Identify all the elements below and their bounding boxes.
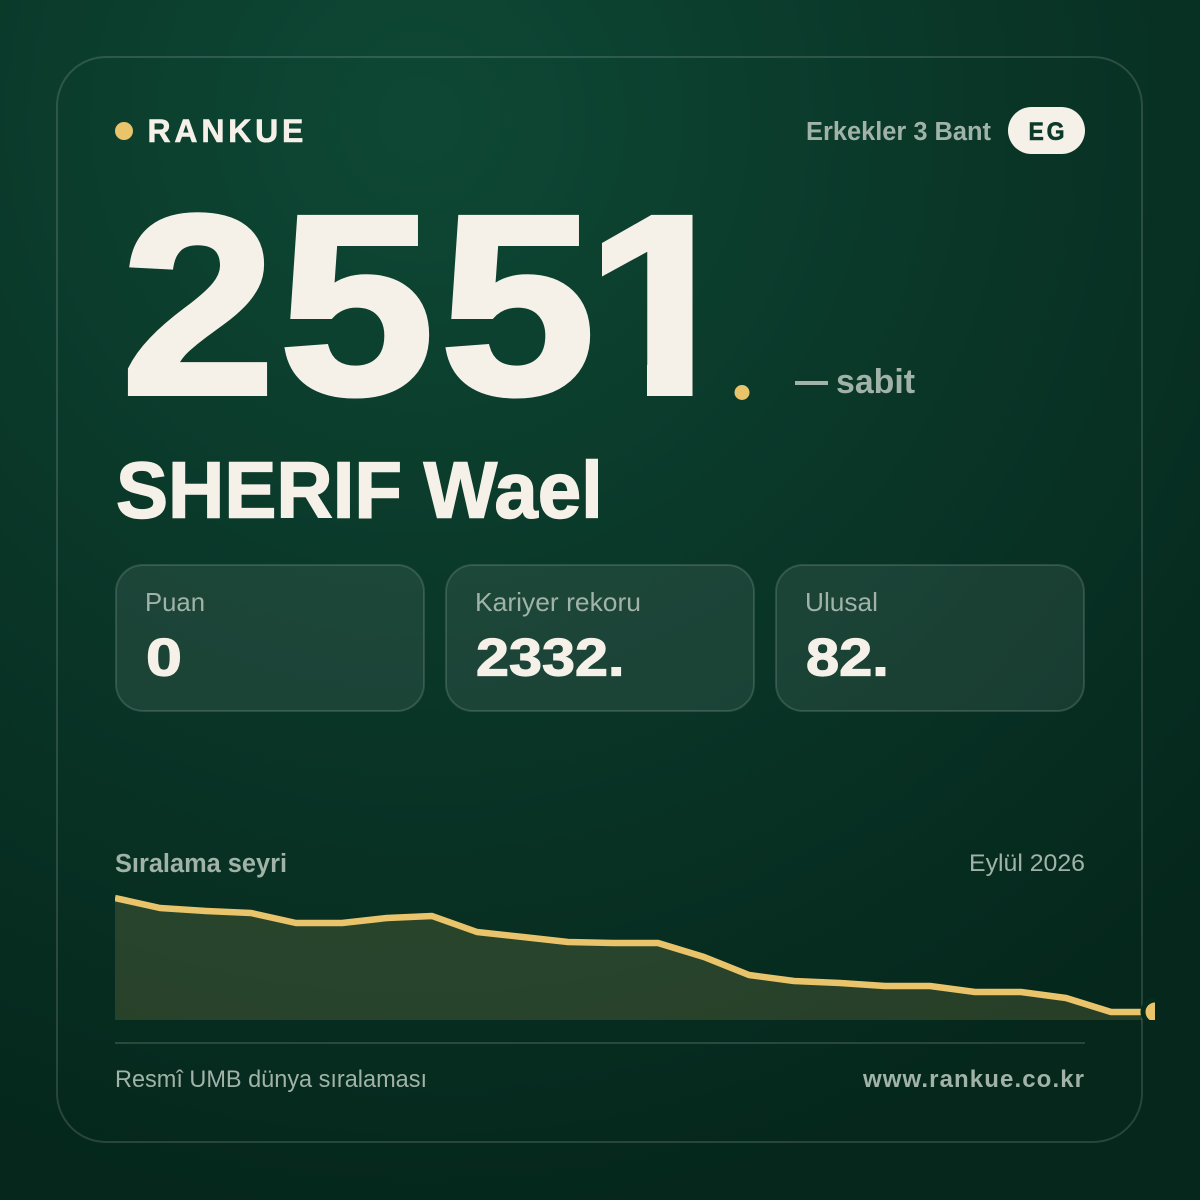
icon: brand dot: [115, 122, 133, 140]
player name: SHERIF Wael: [116, 445, 603, 535]
stat: Puan: [116, 565, 424, 711]
stat: Ulusal: 82.: [806, 628, 889, 687]
website: www.rankue.co.kr: [862, 1066, 1084, 1093]
rank number: 2: [121, 162, 275, 448]
stat: Kariyer rekoru: Kariyer rekoru: [475, 587, 641, 617]
country badge: EG: [1028, 118, 1067, 146]
category label: Erkekler 3 Bant: [806, 118, 992, 146]
stat: Kariyer rekoru: [446, 565, 754, 711]
brand logo: [115, 113, 307, 149]
icon: rank dot: [734, 385, 750, 400]
country badge: [1008, 107, 1085, 154]
chart date: Eylül 2026: [969, 850, 1085, 877]
stat: Kariyer rekoru: 2332.: [476, 627, 624, 687]
line chart: ranking history: [115, 898, 1167, 1024]
stat: Ulusal: Ulusal: [805, 587, 878, 617]
rank number: 5: [279, 162, 434, 448]
rank number: [128, 212, 692, 398]
rank number: 5: [440, 162, 595, 448]
chart heading: Sıralama seyri: [115, 850, 287, 878]
source note: Resmî UMB dünya sıralaması: [115, 1066, 427, 1093]
rank change: sabit: [836, 363, 915, 401]
stat: Ulusal: [776, 565, 1084, 711]
footer: [115, 1042, 1085, 1093]
stat: Puan: Puan: [145, 587, 205, 617]
stat: Puan: 0: [146, 627, 182, 687]
rank change: [795, 363, 915, 401]
brand name: RANKUE: [148, 113, 307, 149]
rank number: 1: [582, 163, 744, 449]
